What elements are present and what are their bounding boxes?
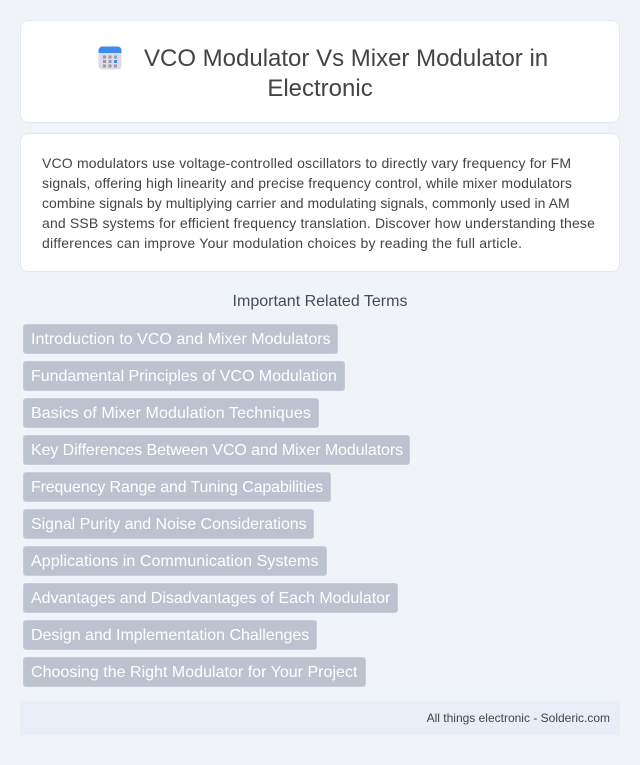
term 3: Basics of Mixer Modulation Techniques bbox=[31, 405, 311, 422]
section heading: Important Related Terms bbox=[233, 293, 407, 310]
summary card bbox=[20, 133, 620, 272]
title: Electronic bbox=[267, 74, 373, 102]
term 9: Design and Implementation Challenges bbox=[31, 627, 309, 644]
footer: All things electronic - Solderic.com bbox=[427, 711, 610, 725]
term 4: Key Differences Between VCO and Mixer Modulators bbox=[31, 442, 403, 459]
summary text: and SSB systems for efficient frequency translation. Discover how understanding these bbox=[42, 215, 595, 231]
summary text: differences can improve Your modulation choices by reading the full article. bbox=[42, 235, 522, 251]
term 4 bbox=[23, 435, 410, 465]
summary text: combine signals by multiplying carrier and modulating signals, commonly used in AM bbox=[42, 195, 570, 211]
term 9 bbox=[23, 620, 317, 650]
term 7 bbox=[23, 546, 327, 576]
term 5 bbox=[23, 472, 331, 502]
summary text: signals, offering high linearity and precise frequency control, while mixer modulators bbox=[42, 175, 572, 191]
term 10 bbox=[23, 657, 366, 687]
term 7: Applications in Communication Systems bbox=[31, 553, 319, 570]
title: VCO Modulator Vs Mixer Modulator in bbox=[144, 45, 548, 72]
term 6 bbox=[23, 509, 314, 539]
term 5: Frequency Range and Tuning Capabilities bbox=[31, 479, 323, 496]
summary text: VCO modulators use voltage-controlled oscillators to directly vary frequency for FM bbox=[42, 155, 571, 171]
icon: calendar bbox=[98, 46, 122, 70]
summary text bbox=[42, 155, 595, 251]
term 1: Introduction to VCO and Mixer Modulators bbox=[31, 331, 331, 348]
header card bbox=[20, 20, 620, 123]
term 3 bbox=[23, 398, 319, 428]
footer bbox=[20, 701, 620, 735]
term 8 bbox=[23, 583, 398, 613]
term 8: Advantages and Disadvantages of Each Modulator bbox=[31, 590, 390, 607]
title bbox=[144, 45, 548, 102]
term 1 bbox=[23, 324, 338, 354]
term 6: Signal Purity and Noise Considerations bbox=[31, 516, 307, 533]
term 2 bbox=[23, 361, 345, 391]
term 10: Choosing the Right Modulator for Your Project bbox=[31, 664, 357, 681]
term 2: Fundamental Principles of VCO Modulation bbox=[31, 368, 337, 385]
